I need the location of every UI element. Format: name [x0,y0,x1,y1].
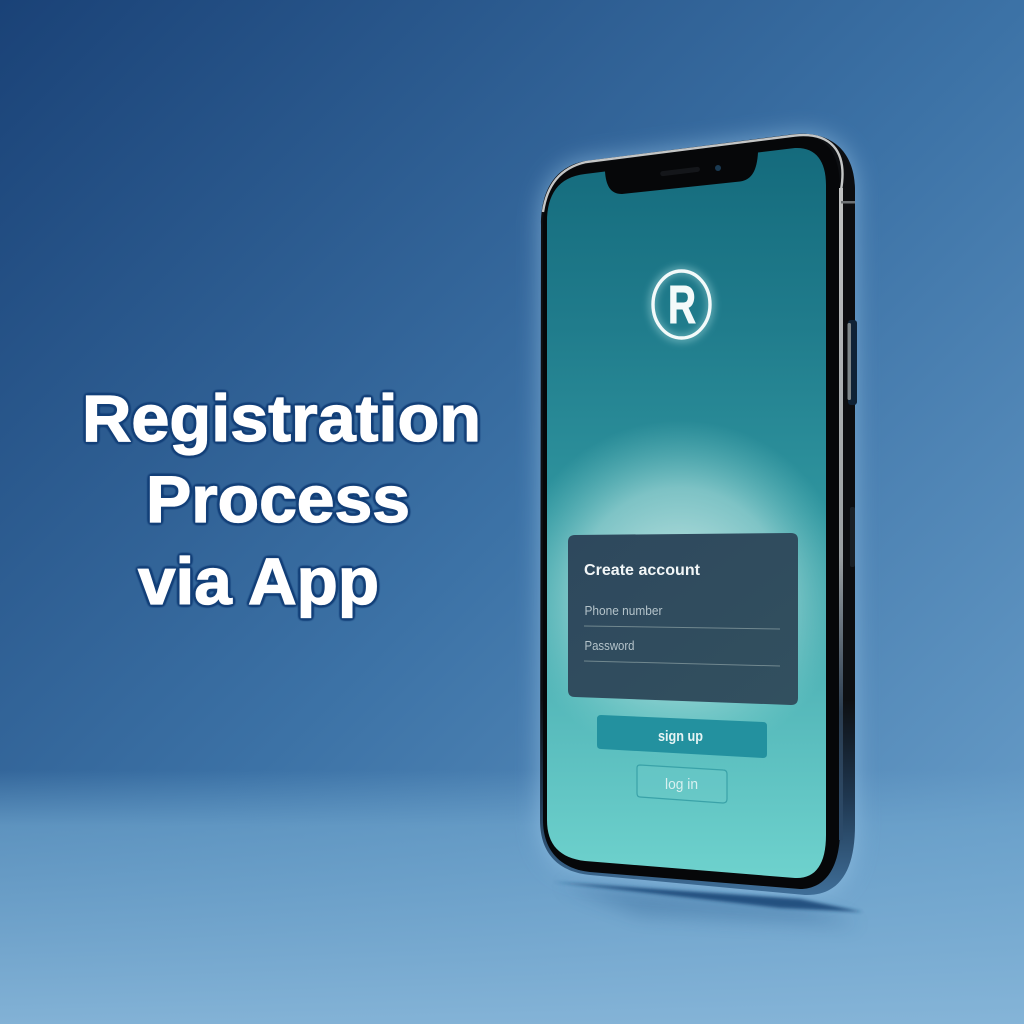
title: Process [146,462,410,536]
phone glow [540,134,855,895]
upper right frame [838,150,855,640]
title [82,381,481,618]
side button upper [848,320,857,405]
phone number field [584,604,780,629]
log in button [637,765,727,803]
phone body [540,134,855,895]
password field: Password [584,639,635,653]
app logo: R [668,275,696,335]
phone [540,134,857,895]
card heading: Create account [584,562,701,579]
app logo [652,270,710,338]
password field [584,639,780,666]
form card [568,533,798,705]
phone ground shadow [553,882,863,925]
metal rim top [543,135,842,212]
notch details [660,165,721,176]
title: via App [138,544,379,618]
log in button: log in [665,776,698,793]
screen [540,140,830,885]
sign up button [597,715,767,758]
title: Registration [82,381,481,455]
side metal strip [839,188,843,840]
phone number field: Phone number [584,604,662,618]
side button lower [850,507,855,567]
sign up button: sign up [658,729,703,745]
black bezel [543,136,840,889]
side band line [841,201,855,204]
